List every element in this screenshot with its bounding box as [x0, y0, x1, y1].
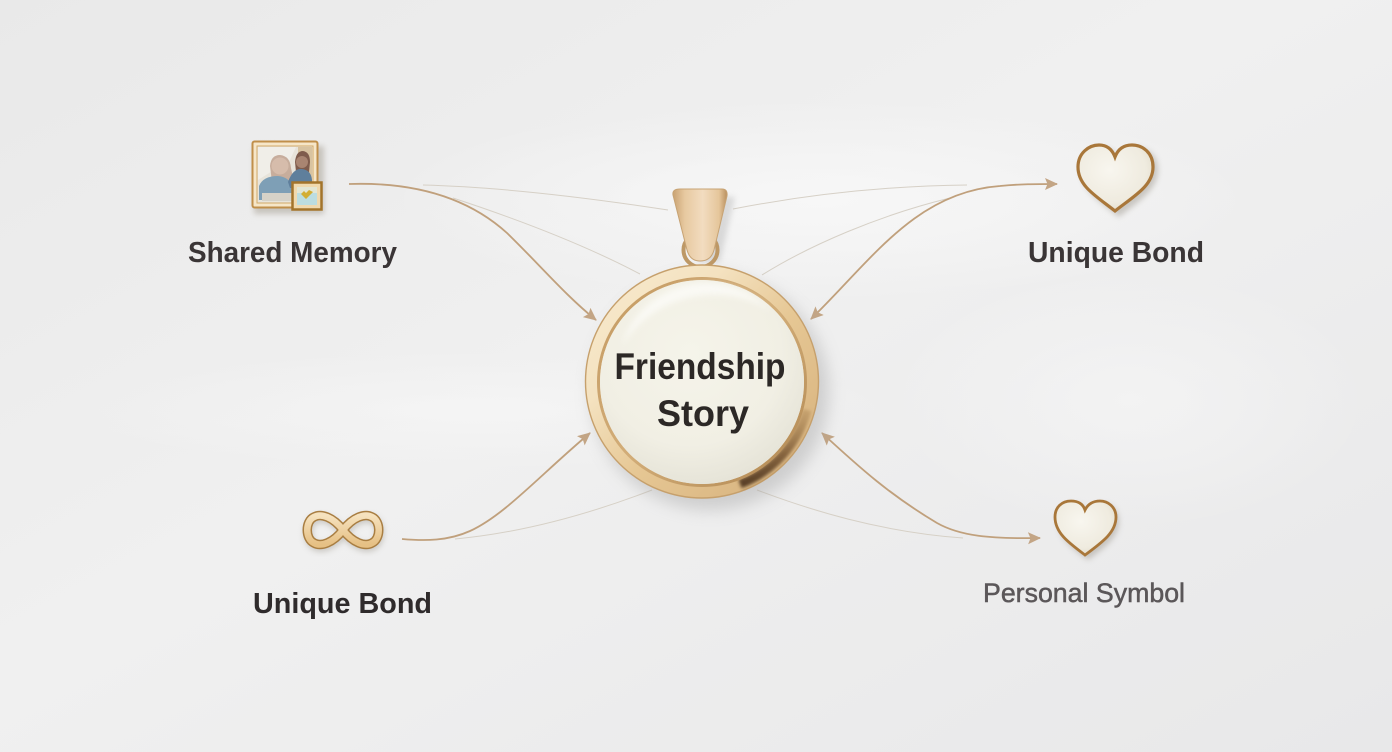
node: lower unique bond: [253, 516, 432, 620]
photo figures: [270, 155, 294, 182]
node: upper unique bond: [1028, 145, 1204, 269]
icon: pendant loop: [684, 233, 718, 267]
pendant pearl face: [600, 280, 804, 484]
small inset photo: [292, 182, 322, 210]
node: shared memory: [188, 142, 397, 269]
icon: small heart: [1055, 501, 1119, 560]
icon: pendant bail: [673, 189, 727, 261]
arrow: upper unique bond double-headed: [811, 184, 1057, 319]
pendant title: Friendship: [614, 346, 786, 387]
pendant ring streak: [740, 410, 807, 484]
pendant title: [614, 346, 786, 434]
pendant highlight: [622, 283, 770, 345]
label: personal symbol: Personal Symbol: [983, 578, 1185, 608]
pendant shadow: [591, 274, 829, 510]
pendant inner rim: [598, 278, 806, 486]
label: shared memory: Shared Memory: [188, 237, 397, 269]
icon: framed photo: [252, 142, 324, 214]
arrow: shared memory to pendant: [349, 184, 596, 320]
bail shadow: [690, 195, 735, 262]
arrow: personal symbol double-headed: [822, 433, 1040, 538]
label: upper unique bond: Unique Bond: [1028, 237, 1204, 269]
icon: infinity symbol: [307, 516, 380, 547]
label: lower unique bond: Unique Bond: [253, 588, 432, 620]
thin connector lines: [423, 185, 967, 539]
pendant title: Story: [657, 393, 749, 434]
pendant ring: [586, 265, 818, 498]
arrow: lower unique bond to pendant: [402, 433, 590, 540]
pendant: [586, 189, 829, 510]
node: personal symbol: [983, 501, 1185, 608]
icon: heart: [1078, 145, 1158, 217]
